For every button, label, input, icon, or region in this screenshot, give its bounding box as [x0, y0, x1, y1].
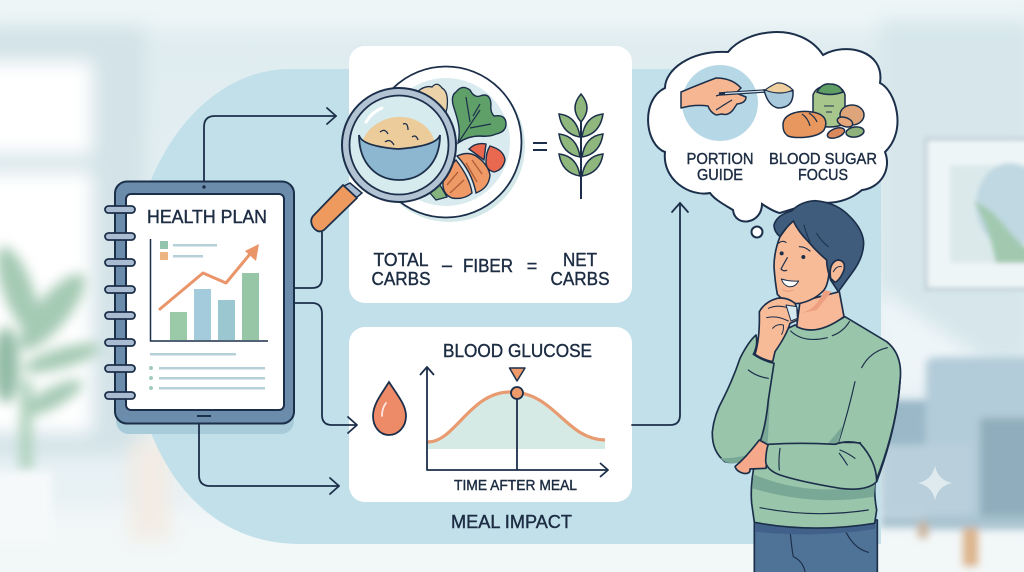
net carbs formula: [372, 250, 610, 289]
food: tomato: [469, 144, 505, 172]
panel: net carbs card: [311, 46, 632, 303]
hair: [774, 201, 864, 292]
connector arrows: [199, 108, 688, 494]
net carbs formula: –: [442, 255, 452, 275]
glucose curve chart: [420, 367, 608, 477]
net carbs formula: CARBS: [372, 269, 430, 289]
plate of food: [370, 66, 525, 222]
bubble labels: BLOOD SUGAR: [769, 151, 877, 168]
crossed hand: [735, 440, 768, 473]
bubble tail dot: [752, 226, 762, 238]
net carbs formula: =: [527, 256, 537, 276]
tablet heading: HEALTH PLAN: [147, 207, 267, 227]
tablet spiral rings: [105, 206, 135, 399]
icon: blood drop: [373, 382, 406, 435]
bubble labels: FOCUS: [798, 167, 848, 184]
icon: hand with measuring spoon: [681, 65, 793, 141]
head: [774, 201, 864, 304]
chart axis label: TIME AFTER MEAL: [454, 478, 577, 494]
sofa: [876, 357, 1024, 566]
ear: [830, 260, 844, 282]
bubble labels: [686, 151, 877, 184]
thinking man: [712, 201, 901, 572]
raised sweater arm: [712, 335, 774, 462]
net carbs formula: NET: [563, 250, 597, 270]
blue backdrop panel: [128, 69, 881, 544]
net carbs formula: FIBER: [463, 256, 513, 276]
elbow edge right: [877, 382, 900, 482]
sweater body: [751, 317, 901, 528]
crossed forearm: [766, 442, 877, 489]
meal impact caption: MEAL IMPACT: [451, 512, 572, 532]
bubble labels: PORTION: [686, 151, 754, 168]
panel: health plan tablet: [105, 182, 294, 434]
thought bubble: [648, 32, 898, 238]
sparkle: [918, 466, 952, 500]
picture frame: [926, 139, 1024, 289]
bubble labels: GUIDE: [697, 167, 743, 184]
food: salad leaves: [452, 87, 506, 143]
food: grain: [417, 84, 447, 116]
trousers: [754, 520, 877, 572]
net carbs formula: CARBS: [550, 269, 610, 289]
icon: healthy foods: [783, 84, 865, 140]
text placeholder lines: [149, 353, 265, 390]
panel: blood glucose card: [349, 327, 632, 502]
net carbs formula: TOTAL: [374, 250, 428, 270]
hand on chin: [755, 298, 798, 362]
food: grilled chicken: [443, 154, 490, 198]
bar and line chart: [150, 239, 268, 341]
neck: [797, 292, 844, 330]
eyes and mouth: [780, 251, 784, 255]
blood glucose heading: BLOOD GLUCOSE: [443, 341, 592, 361]
equals sign: [533, 143, 547, 150]
magnifying glass over rice bowl: [311, 88, 456, 231]
icon: wheat fiber: [559, 94, 603, 199]
